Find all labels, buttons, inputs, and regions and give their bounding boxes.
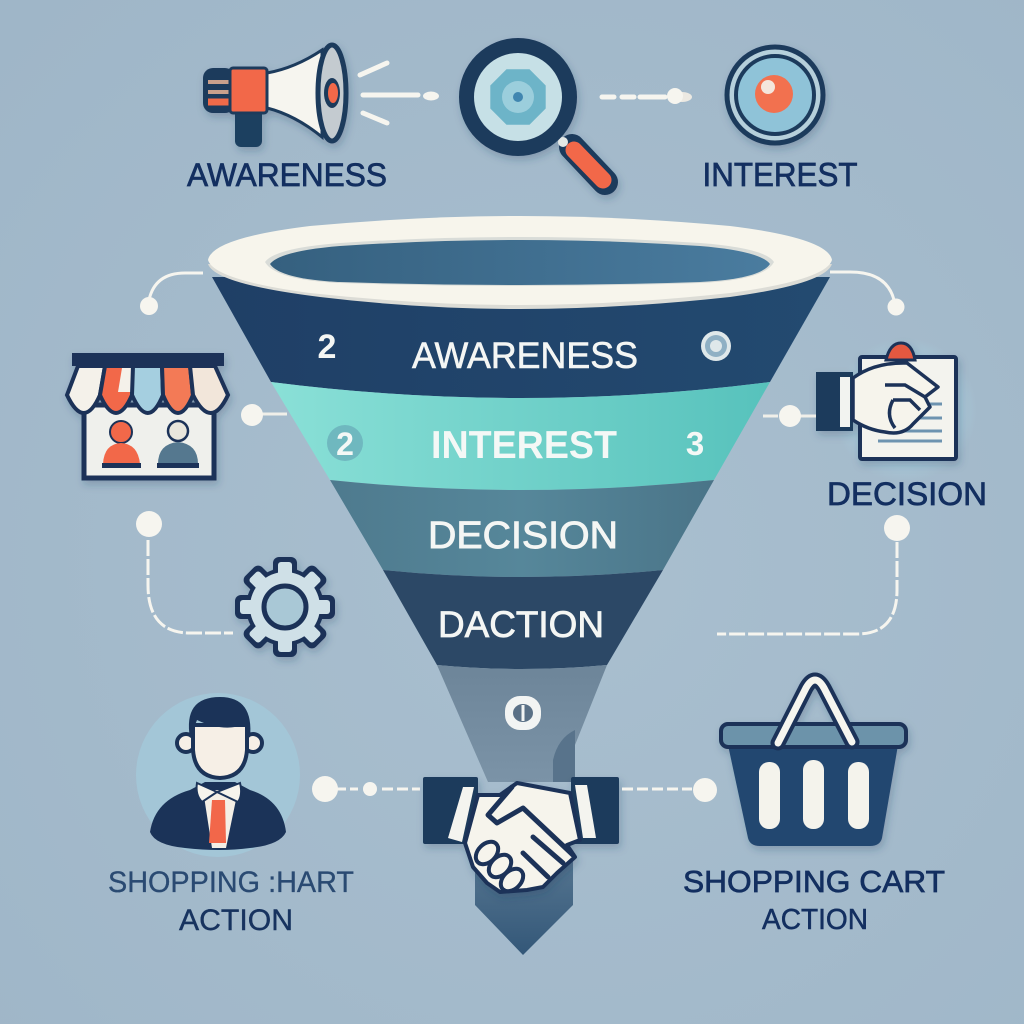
number: 2 middle: 2 xyxy=(336,426,354,462)
connector: node left top xyxy=(140,297,158,315)
connector: businessman to handshake xyxy=(335,788,420,790)
icon: eye marker spout xyxy=(505,696,541,730)
halo: decision xyxy=(833,338,977,482)
connector: right bracket xyxy=(717,542,897,634)
label: shopping chart action left: SHOPPING :HART xyxy=(108,866,354,899)
label: shopping cart action right: ACTION xyxy=(762,904,868,936)
connector: node decision xyxy=(779,405,801,427)
number: 2 top: 2 xyxy=(318,328,336,366)
label: decision: DECISION xyxy=(827,476,987,512)
icon: eye marker top xyxy=(701,331,731,361)
icon: megaphone xyxy=(203,45,346,147)
funnel section: decision xyxy=(330,480,714,577)
funnel label: action: DACTION xyxy=(438,604,604,645)
label: shopping chart action left xyxy=(108,866,354,937)
connector: node right bracket xyxy=(884,515,910,541)
funnel label: decision: DECISION xyxy=(428,515,618,557)
arrow: megaphone to magnifier xyxy=(363,92,439,100)
icon: megaphone sound rays xyxy=(360,63,387,123)
funnel spout xyxy=(437,665,607,782)
connector: gear link xyxy=(148,540,233,633)
connector: funnel left to shop xyxy=(149,273,203,300)
funnel rim xyxy=(208,216,832,305)
icon: interest target xyxy=(727,47,823,143)
label: shopping cart action right xyxy=(683,864,945,936)
number: 3: 3 xyxy=(686,425,704,462)
funnel opening xyxy=(270,240,770,285)
icon: handshake xyxy=(423,777,619,896)
connector: node businessman xyxy=(312,776,338,802)
funnel label: interest: INTEREST xyxy=(431,424,617,467)
shop person orange xyxy=(102,421,141,468)
funnel spout darker band xyxy=(553,730,575,782)
connector: handshake to basket xyxy=(622,788,692,790)
connector: node right top xyxy=(888,298,904,316)
arrow: magnifier to target xyxy=(602,88,692,104)
icon: shop xyxy=(67,353,228,478)
connector: funnel to decision xyxy=(763,414,816,418)
icon: shopping basket xyxy=(721,680,906,846)
label: awareness: AWARENESS xyxy=(187,157,387,193)
icon: gear xyxy=(235,557,335,657)
funnel opening lip xyxy=(265,237,774,286)
label: shopping cart action right: SHOPPING CART xyxy=(683,864,945,899)
label: interest: INTEREST xyxy=(702,156,858,193)
funnel xyxy=(208,216,832,955)
icon: magnifying glass xyxy=(466,46,605,182)
connector: node shop xyxy=(241,404,263,426)
funnel rim shadow xyxy=(208,264,832,309)
connector: node basket xyxy=(693,778,717,802)
connector: node gear xyxy=(136,511,162,537)
connector: shop to funnel xyxy=(262,412,287,416)
funnel section: action xyxy=(383,570,663,669)
funnel section: interest xyxy=(271,382,770,490)
connector: funnel right to decision xyxy=(830,272,895,305)
icon: decision document with hand xyxy=(816,343,956,459)
number: 2 middle xyxy=(327,425,363,462)
funnel label: awareness: AWARENESS xyxy=(412,335,638,376)
icon: businessman xyxy=(136,693,300,857)
funnel section: awareness xyxy=(212,277,830,398)
label: shopping chart action left: ACTION xyxy=(179,904,293,937)
funnel tip xyxy=(475,860,573,955)
shop person teal xyxy=(157,421,199,468)
connector: node small xyxy=(363,782,377,796)
